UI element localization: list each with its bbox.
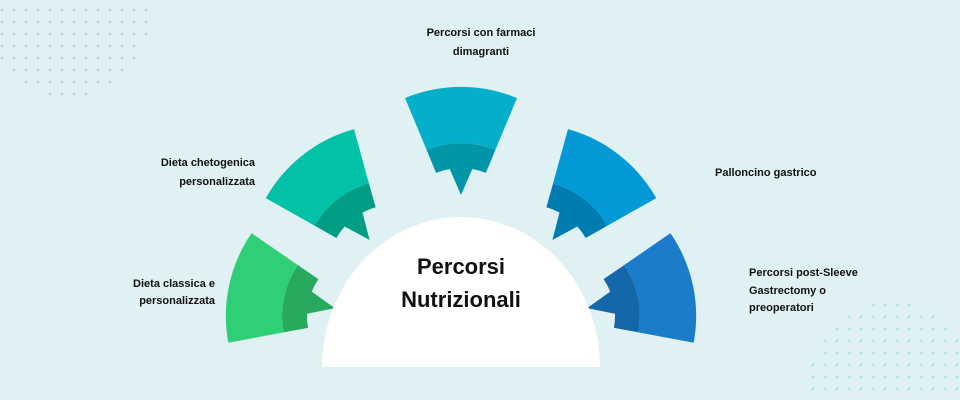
label: chetogenica: personalizzata bbox=[179, 176, 256, 188]
label: post-sleeve: preoperatori bbox=[749, 302, 814, 314]
label: classica bbox=[133, 278, 216, 307]
segment: right upper (palloncino) bbox=[508, 120, 663, 275]
label: farmaci: dimagranti bbox=[453, 46, 509, 58]
title: Nutrizionali bbox=[401, 287, 521, 312]
segment: left upper (chetogenica) bbox=[259, 120, 414, 275]
center half circle bbox=[322, 217, 600, 367]
label: post-sleeve: Percorsi post-Sleeve bbox=[749, 267, 858, 279]
title bbox=[401, 254, 521, 312]
label: chetogenica: Dieta chetogenica bbox=[161, 157, 256, 169]
label: classica: personalizzata bbox=[139, 295, 216, 307]
label: post-sleeve bbox=[749, 267, 858, 314]
label: farmaci: Percorsi con farmaci bbox=[427, 27, 535, 39]
label: farmaci bbox=[427, 27, 535, 58]
segment: right lower (post-sleeve) bbox=[576, 231, 705, 363]
segment: top (farmaci) bbox=[405, 87, 517, 195]
label: classica: Dieta classica e bbox=[133, 278, 215, 290]
title: Percorsi bbox=[417, 254, 505, 279]
label: post-sleeve: Gastrectomy o bbox=[749, 285, 826, 297]
segment: left lower (classica) bbox=[217, 231, 346, 363]
label: chetogenica bbox=[161, 157, 256, 188]
label: palloncino: Palloncino gastrico bbox=[715, 167, 817, 179]
